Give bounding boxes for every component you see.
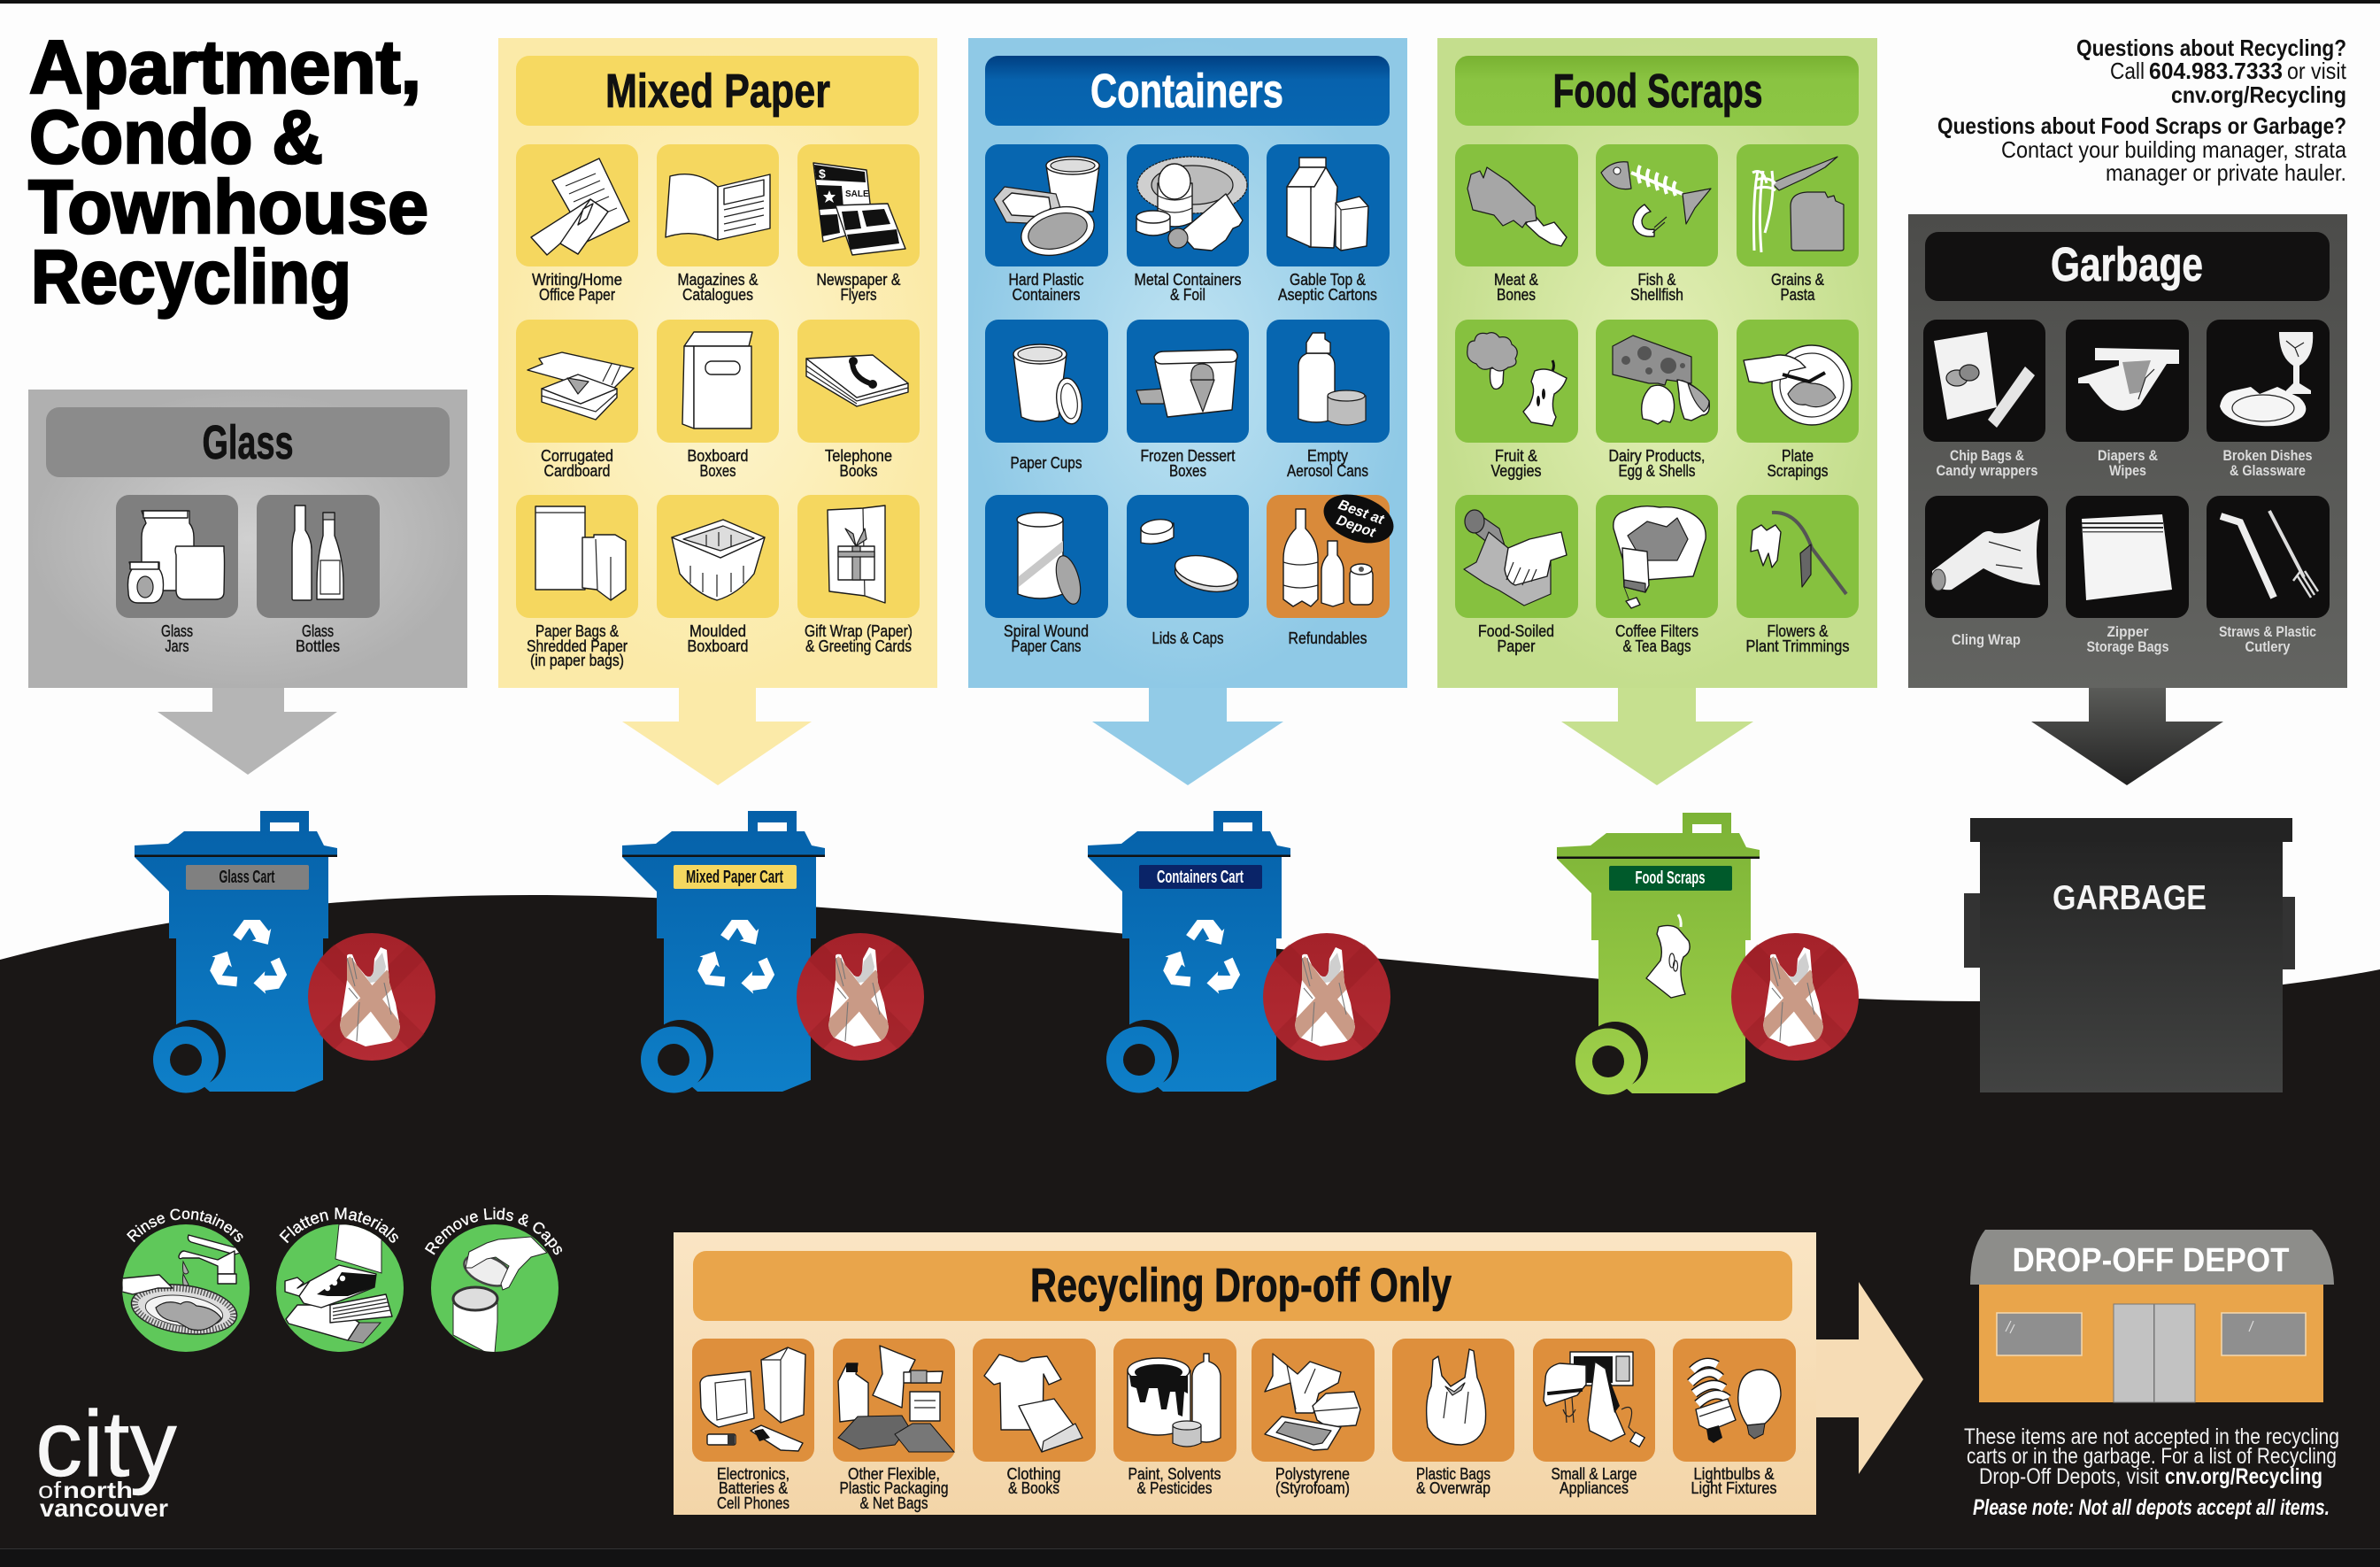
tile: Flowers & Plant Trimmings [1737, 495, 1859, 655]
tile: Gift Wrap & Greeting Cards: Gift Wrap (Paper) [805, 622, 913, 640]
tile: Chip Bags & Candy wrappers: Candy wrappers [1937, 462, 2037, 479]
panel: Recycling Drop-off Only [674, 1232, 1923, 1515]
title: Condo & [29, 96, 323, 180]
contact information text: Call [2110, 58, 2145, 84]
depot note text: Drop-Off Depots, visit [1979, 1464, 2159, 1489]
tile: Magazines & Catalogues: Catalogues [682, 286, 753, 304]
tile: Lids & Caps [1127, 495, 1249, 647]
no plastic bags icon [1263, 933, 1390, 1061]
tile: Hard Plastic Containers: Hard Plastic [1009, 271, 1083, 289]
tile: Zipper Storage Bags [2066, 496, 2189, 655]
tile: Fruit & Veggies: Fruit & [1495, 447, 1537, 465]
tile: Dairy Products, Egg & Shells: Dairy Products, [1609, 447, 1705, 465]
step: Remove Lids & Caps [425, 1208, 563, 1352]
tile: Clothing & Books [973, 1339, 1096, 1497]
tile: Coffee Filters & Tea Bags [1596, 495, 1718, 655]
tile: Paint, Solvents & Pesticides: Paint, Solvents [1128, 1465, 1221, 1483]
tile: Metal Containers & Foil: Metal Containers [1135, 271, 1241, 289]
tile: Dairy Products, Egg & Shells: Egg & Shells [1618, 462, 1696, 480]
tile: Fruit & Veggies [1455, 320, 1578, 480]
cart: Glass [135, 811, 337, 1092]
step: Remove Lids & Caps: Remove Lids & Caps [425, 1208, 563, 1255]
panel: Food Scraps [1437, 38, 1877, 688]
tile: Small & Large Appliances [1533, 1339, 1655, 1497]
tile: Fish & Shellfish [1596, 144, 1718, 304]
cart: Mixed Paper: Mixed Paper Cart [686, 868, 783, 887]
tile: Gift Wrap & Greeting Cards [797, 495, 920, 655]
tile: Spiral Wound Paper Cans: Paper Cans [1011, 637, 1082, 655]
tile: Cling Wrap: Cling Wrap [1952, 631, 2021, 648]
tile: Straws & Plastic Cutlery: Cutlery [2245, 638, 2291, 655]
no plastic bags icon [797, 933, 924, 1061]
tile: Fruit & Veggies: Veggies [1490, 462, 1542, 480]
contact information text: Questions about Recycling? [2076, 35, 2346, 61]
ground: black hill [0, 895, 2380, 1567]
title: Townhouse [28, 166, 428, 250]
step: Flatten Materials: Flatten Materials [279, 1208, 398, 1243]
tile: Paint, Solvents & Pesticides [1113, 1339, 1236, 1497]
tile: Flowers & Plant Trimmings: Flowers & [1767, 622, 1829, 640]
tile: Paper Bags & Shredded Paper: Shredded Paper [527, 637, 628, 655]
tile: Lightbulbs & Light Fixtures: Light Fixtures [1691, 1479, 1777, 1497]
tile: Writing/Home Office Paper [516, 144, 638, 304]
tile: Small & Large Appliances: Small & Large [1551, 1465, 1637, 1483]
contact information text: or visit [2287, 58, 2347, 84]
tile: Spiral Wound Paper Cans [985, 495, 1108, 655]
tile: Paper Bags & Shredded Paper: (in paper bags) [530, 652, 624, 669]
tile: Clothing & Books: Clothing [1007, 1465, 1060, 1483]
tile: Hard Plastic Containers: Containers [1013, 286, 1080, 304]
tile: Plastic Bags & Overwrap: & Overwrap [1416, 1479, 1490, 1497]
tile: Refundables: Refundables [1289, 629, 1367, 647]
step: Flatten Materials [276, 1208, 404, 1352]
tile: Electronics, Batteries & Cell Phones: Electronics, [717, 1465, 789, 1483]
tile: Empty Aerosol Cans: Empty [1307, 447, 1348, 465]
tile: Zipper Storage Bags: Storage Bags [2087, 638, 2168, 655]
heading: Recycling Drop-off Only: Recycling Drop-off Only [1030, 1259, 1452, 1312]
tile: Telephone Books [797, 320, 920, 480]
depot building: DROP-OFF DEPOT [2013, 1242, 2289, 1279]
tile: Boxboard Boxes: Boxboard [687, 447, 749, 465]
tile: Corrugated Cardboard: Corrugated [541, 447, 613, 465]
tile: Magazines & Catalogues: Magazines & [678, 271, 758, 289]
heading: Glass: Glass [202, 416, 294, 469]
tile: Boxboard Boxes [657, 320, 779, 480]
tile: Glass Jars [116, 495, 238, 655]
step: Rinse Containers: Rinse Containers [127, 1209, 243, 1243]
tile: Plate Scrapings: Plate [1782, 447, 1814, 465]
tile: Grains & Pasta: Grains & [1771, 271, 1824, 289]
heading: Food Scraps: Food Scraps [1552, 65, 1763, 118]
logo: City of North Vancouver: north [63, 1477, 133, 1503]
tile: Broken Dishes & Glassware: Broken Dishes [2223, 447, 2312, 464]
tile: Glass Bottles: Bottles [296, 637, 340, 655]
contact information text: manager or private hauler. [2106, 159, 2346, 186]
tile: Moulded Boxboard: Boxboard [687, 637, 749, 655]
tile: Polystyrene (Styrofoam): Polystyrene [1275, 1465, 1350, 1483]
tile: Zipper Storage Bags: Zipper [2107, 623, 2149, 640]
tile: Small & Large Appliances: Appliances [1560, 1479, 1629, 1497]
depot building [1970, 1230, 2334, 1402]
heading: Mixed Paper: Mixed Paper [605, 65, 830, 118]
tile: Fish & Shellfish: Fish & [1637, 271, 1676, 289]
tile: Plastic Bags & Overwrap [1392, 1339, 1514, 1497]
tile: Telephone Books: Books [839, 462, 878, 480]
contact information text: 604.983.7333 [2149, 58, 2283, 84]
tile: Other Flexible, Plastic Packaging & Net Bags [833, 1339, 955, 1512]
tile: Magazines & Catalogues [657, 144, 779, 304]
tile: Electronics, Batteries & Cell Phones [692, 1339, 814, 1512]
tile: Paper Cups: Paper Cups [1011, 454, 1082, 472]
panel: Glass [28, 390, 467, 688]
contact information text [1937, 35, 2347, 186]
tile: Glass Jars: Glass [161, 622, 193, 640]
tile: Cling Wrap [1925, 496, 2048, 648]
depot note text: cnv.org/Recycling [2165, 1464, 2322, 1489]
tile: Paper Bags & Shredded Paper: Paper Bags & [535, 622, 619, 640]
logo: City of North Vancouver: of [38, 1477, 62, 1503]
tile: Meat & Bones: Meat & [1494, 271, 1538, 289]
no plastic bags icon [308, 933, 435, 1061]
badge: Best at Depot [1317, 485, 1400, 552]
panel: Mixed Paper [498, 38, 937, 688]
tile: Straws & Plastic Cutlery [2207, 496, 2330, 655]
tile: Electronics, Batteries & Cell Phones: Batteries & [719, 1479, 788, 1497]
tile: Food-Soiled Paper: Paper [1498, 637, 1535, 655]
tile: Other Flexible, Plastic Packaging & Net Bags: & Net Bags [860, 1494, 928, 1512]
tile: Polystyrene (Styrofoam): (Styrofoam) [1275, 1479, 1350, 1497]
tile: Broken Dishes & Glassware [2207, 320, 2330, 479]
cart: Containers: Containers Cart [1157, 868, 1244, 887]
tile: Newspaper & Flyers [797, 144, 920, 304]
tile: Flowers & Plant Trimmings: Plant Trimmings [1745, 637, 1850, 655]
tile: Food-Soiled Paper [1455, 495, 1578, 655]
title: Apartment, [29, 26, 421, 110]
tile: Plate Scrapings: Scrapings [1767, 462, 1829, 480]
tile: Glass Bottles: Glass [302, 622, 334, 640]
tile: Coffee Filters & Tea Bags: & Tea Bags [1623, 637, 1691, 655]
tile: Frozen Dessert Boxes [1127, 320, 1249, 480]
cart: Food Scraps [1557, 813, 1760, 1094]
cart: Containers [1088, 811, 1290, 1092]
tile: Newspaper & Flyers: Flyers [841, 286, 876, 304]
cart: Glass: Glass Cart [220, 868, 275, 887]
contact information text: cnv.org/Recycling [2171, 81, 2346, 108]
heading: Containers: Containers [1090, 65, 1283, 118]
tile: Refundables [1267, 485, 1400, 647]
badge: Best at Depot: Depot [1335, 513, 1378, 541]
tile: Electronics, Batteries & Cell Phones: Cell Phones [717, 1494, 789, 1512]
tile: Diapers & Wipes: Diapers & [2098, 447, 2158, 464]
logo: City of North Vancouver: vancouver [40, 1494, 168, 1522]
tile: Fish & Shellfish: Shellfish [1630, 286, 1683, 304]
contact information text: Contact your building manager, strata [2001, 136, 2346, 163]
garbage bin: GARBAGE [2053, 879, 2207, 917]
tile: Metal Containers & Foil [1127, 144, 1249, 304]
tile: Spiral Wound Paper Cans: Spiral Wound [1004, 622, 1089, 640]
arrow: Mixed Paper [622, 688, 812, 785]
tile: Food-Soiled Paper: Food-Soiled [1478, 622, 1554, 640]
tile: Clothing & Books: & Books [1008, 1479, 1059, 1497]
tile: Meat & Bones: Bones [1497, 286, 1536, 304]
cart: Food Scraps: Food Scraps [1636, 868, 1705, 888]
tile: Gable Top & Aseptic Cartons [1267, 144, 1390, 304]
tile: Writing/Home Office Paper: Office Paper [539, 286, 615, 304]
tile: Other Flexible, Plastic Packaging & Net Bags: Plastic Packaging [839, 1479, 949, 1497]
tile: Hard Plastic Containers [985, 144, 1108, 304]
tile: Dairy Products, Egg & Shells [1596, 320, 1718, 480]
badge: Best at Depot: Best at [1336, 498, 1386, 528]
tile: Boxboard Boxes: Boxes [699, 462, 736, 480]
tile: Newspaper & Flyers: $ [819, 166, 826, 181]
logo: City of North Vancouver: city [35, 1392, 177, 1496]
cart: Mixed Paper [622, 811, 825, 1092]
tile: Gable Top & Aseptic Cartons: Gable Top & [1290, 271, 1366, 289]
tile: Empty Aerosol Cans [1267, 320, 1390, 480]
tile: Grains & Pasta [1737, 144, 1859, 304]
tile: Diapers & Wipes: Wipes [2109, 462, 2146, 479]
tile: Glass Jars: Jars [165, 637, 189, 655]
tile: Coffee Filters & Tea Bags: Coffee Filters [1615, 622, 1698, 640]
tile: Metal Containers & Foil: & Foil [1170, 286, 1205, 304]
arrow: Glass [158, 688, 337, 775]
tile: Empty Aerosol Cans: Aerosol Cans [1287, 462, 1368, 480]
depot note text [1964, 1424, 2339, 1520]
tile: Telephone Books: Telephone [825, 447, 892, 465]
tile: Diapers & Wipes [2066, 320, 2189, 479]
heading: Garbage: Garbage [2051, 238, 2203, 291]
tile: Writing/Home Office Paper: Writing/Home [532, 271, 622, 289]
title: Recycling [31, 235, 351, 320]
tile: Lightbulbs & Light Fixtures: Lightbulbs & [1694, 1465, 1774, 1483]
tile: Grains & Pasta: Pasta [1781, 286, 1815, 304]
tile: Paint, Solvents & Pesticides: & Pesticides [1136, 1479, 1213, 1497]
tile: Plate Scrapings [1737, 320, 1859, 480]
tile: Corrugated Cardboard [516, 320, 638, 480]
tile: Moulded Boxboard [657, 495, 779, 655]
tile: Polystyrene (Styrofoam) [1252, 1339, 1375, 1497]
tile: Corrugated Cardboard: Cardboard [543, 462, 611, 480]
tile: Plastic Bags & Overwrap: Plastic Bags [1416, 1465, 1490, 1483]
title [28, 26, 428, 320]
arrow: to depot [1816, 1282, 1923, 1474]
panel: Containers [968, 38, 1407, 688]
tile: Gift Wrap & Greeting Cards: & Greeting Cards [805, 637, 912, 655]
tile: Broken Dishes & Glassware: & Glassware [2230, 462, 2306, 479]
garbage bin [1964, 818, 2295, 1092]
tile: Lightbulbs & Light Fixtures [1673, 1339, 1796, 1497]
tile: Newspaper & Flyers: SALE [845, 189, 869, 199]
arrow: Food Scraps [1561, 688, 1753, 785]
tile: Other Flexible, Plastic Packaging & Net Bags: Other Flexible, [848, 1465, 940, 1483]
tile: Frozen Dessert Boxes: Frozen Dessert [1140, 447, 1236, 465]
tile: Straws & Plastic Cutlery: Straws & Plastic [2219, 623, 2316, 640]
no plastic bags icon [1731, 933, 1859, 1061]
tile: Chip Bags & Candy wrappers: Chip Bags & [1950, 447, 2024, 464]
icon: apple core [1646, 915, 1690, 998]
tile: Paper Cups [985, 320, 1108, 472]
tile: Meat & Bones [1455, 144, 1578, 304]
tile: Lids & Caps: Lids & Caps [1152, 629, 1223, 647]
tile: Paper Bags & Shredded Paper [516, 495, 638, 669]
tile: Frozen Dessert Boxes: Boxes [1169, 462, 1206, 480]
tile: Gable Top & Aseptic Cartons: Aseptic Cartons [1278, 286, 1377, 304]
arrow: Containers [1092, 688, 1283, 785]
step: Rinse Containers [122, 1209, 250, 1352]
tile: Moulded Boxboard: Moulded [689, 622, 746, 640]
arrow: Garbage [2031, 688, 2223, 785]
tile: Glass Bottles [257, 495, 380, 655]
tile: Chip Bags & Candy wrappers [1923, 320, 2045, 479]
panel: Garbage [1908, 214, 2347, 688]
tile: Newspaper & Flyers: Newspaper & [816, 271, 901, 289]
